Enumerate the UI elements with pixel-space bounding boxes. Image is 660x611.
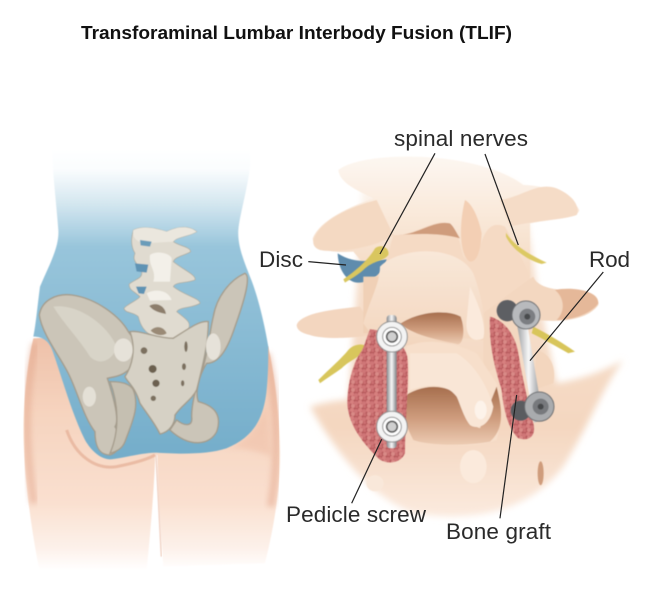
left lower nerve: [318, 345, 367, 383]
bone graft left: [347, 329, 408, 463]
label: Disc: Disc: [259, 247, 303, 272]
label: spinal nerves: spinal nerves: [394, 126, 528, 151]
pelvis and sacrum: [39, 273, 247, 455]
top vertebra: [313, 156, 579, 327]
illustration: lower back with pelvis and spine: [23, 147, 280, 570]
label: Bone graft: Bone graft: [446, 519, 552, 544]
title: Transforaminal Lumbar Interbody Fusion (TLIF): [81, 23, 512, 43]
illustration: surgical close-up of fused lumbar spine: [297, 153, 623, 518]
torso underwear: [33, 147, 268, 459]
lower vertebra: [366, 342, 554, 491]
vertebrae column: [124, 227, 200, 340]
right upper nerve: [506, 233, 547, 264]
left upper nerve: [343, 246, 389, 283]
surrounding tissue: [310, 163, 623, 516]
rod and pedicle screws: left: [377, 315, 407, 448]
label: Pedicle screw: Pedicle screw: [286, 502, 427, 527]
leader lines: [308, 153, 603, 518]
bone graft right: [490, 317, 534, 439]
right middle nerve: [532, 327, 575, 353]
middle vertebra: [297, 251, 598, 373]
rod and pedicle screws: right: [497, 300, 554, 423]
legs: [23, 330, 280, 570]
disc: [338, 253, 387, 283]
label: Rod: Rod: [589, 247, 630, 272]
